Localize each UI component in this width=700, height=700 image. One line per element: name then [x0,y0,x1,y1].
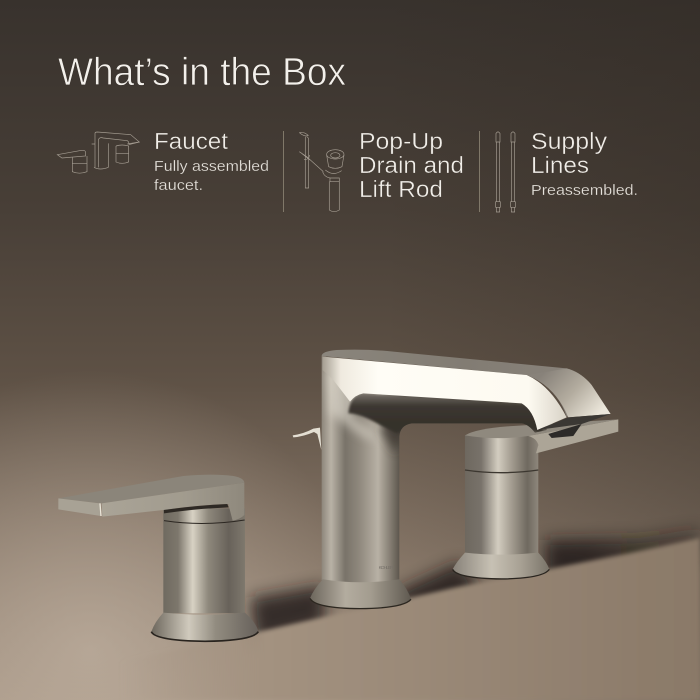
item: supply lines [496,128,638,212]
heading: Pop-Up Drain and Lift Rod: Drain and [359,152,464,178]
icon: pop-up drain line drawing [299,132,344,212]
item: faucet [57,128,269,194]
spout end face [528,368,611,417]
divider [283,131,284,212]
icon: faucet line drawing [57,132,139,173]
handle base [151,613,258,641]
aerator [537,414,611,438]
title: What’s in the Box [58,51,346,94]
heading: Pop-Up Drain and Lift Rod: Lift Rod [359,176,443,202]
spout bright face [323,357,567,430]
heading: Supply Lines: Lines [531,152,589,178]
product: left handle [58,475,258,641]
description: supply lines: Preassembled. [531,182,638,199]
right handle base [453,553,549,579]
right lever top [465,419,618,438]
divider [479,131,480,212]
item: drain and lift rod [299,128,464,212]
lever top [58,475,244,503]
product: spout body and right handle [293,350,618,609]
heading: Pop-Up Drain and Lift Rod: Pop-Up [359,128,443,154]
spout underside shading [327,370,543,453]
icon: supply lines line drawing [496,132,515,212]
ground plane [120,538,700,700]
description: faucet: Fully assembled [154,158,269,175]
right handle cylinder [465,435,538,555]
description: faucet: faucet. [154,177,203,194]
heading: Supply Lines: Supply [531,128,607,154]
lever front [102,483,244,521]
body base [310,579,411,609]
heading: Faucet: Faucet [154,128,229,154]
cast shadows [250,528,700,645]
spout top [322,350,610,417]
drain lift rod [293,428,321,450]
logo mark: KOHLER [379,565,394,570]
right lever arm [528,419,618,453]
body column [322,356,547,583]
handle cylinder [163,508,245,613]
